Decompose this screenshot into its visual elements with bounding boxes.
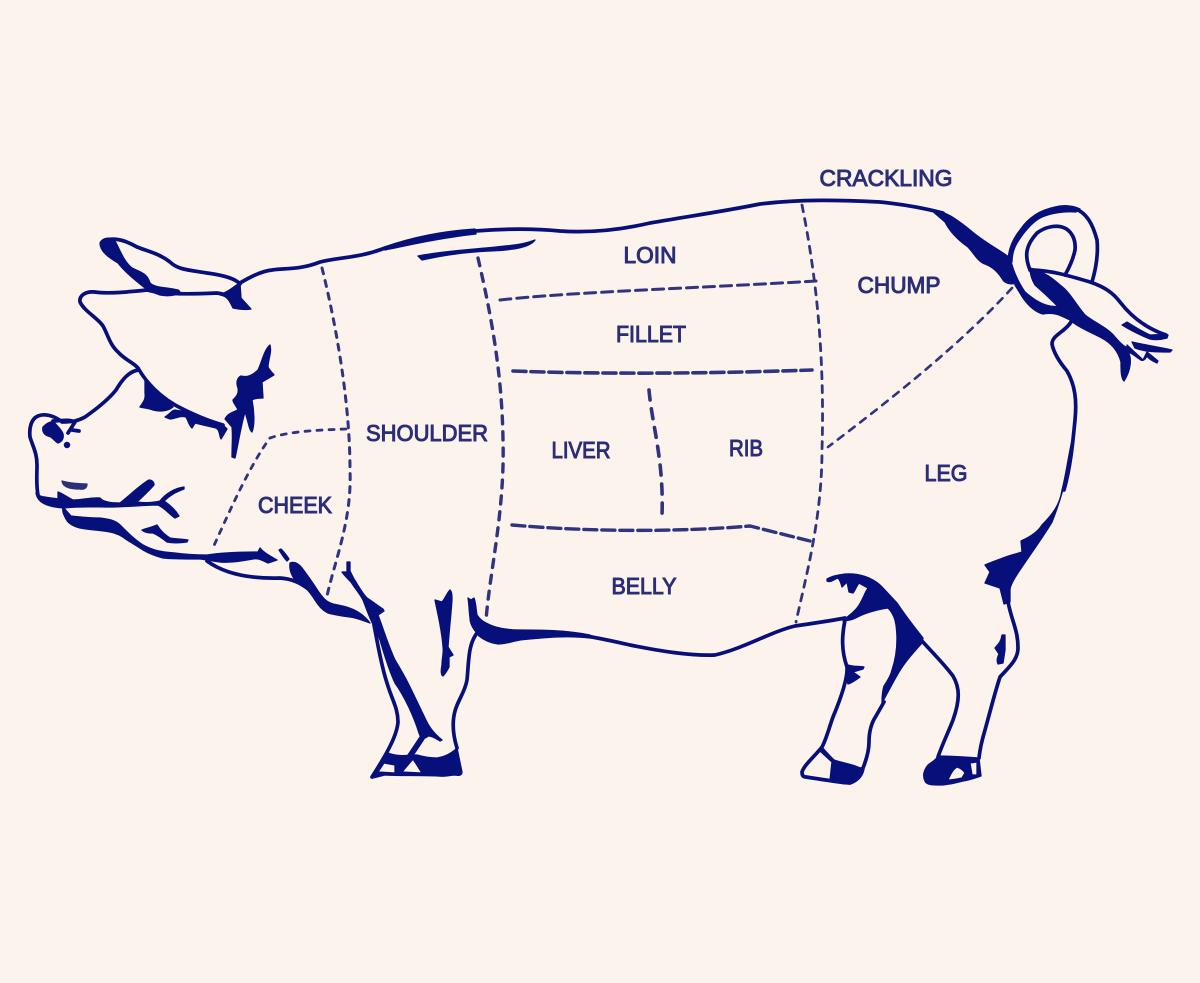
front leg connector: [408, 737, 424, 757]
neck fold: [290, 562, 370, 623]
liver rib divider: [649, 390, 662, 515]
tail outer loop: [1073, 208, 1097, 282]
far hind foot: [820, 747, 864, 784]
near hind foot: [924, 756, 981, 785]
tail outer top: [1008, 206, 1080, 262]
rump shadow on back: [930, 209, 1017, 284]
snout: [30, 370, 138, 495]
chin wrinkle: [142, 525, 188, 543]
cheek line: [212, 429, 346, 550]
neck fold dash: [279, 549, 289, 561]
rear line of hind leg: [979, 602, 1018, 758]
belly line: [540, 618, 845, 655]
cut labels: [258, 165, 968, 599]
label: shoulder: SHOULDER: [366, 420, 488, 446]
pig outline: [30, 200, 1166, 783]
thick ink shadows: [36, 206, 1172, 785]
front foot: [372, 748, 462, 778]
wrinkle under eye: [165, 410, 227, 439]
front leg front line: [372, 625, 398, 777]
dashed cut lines: [212, 205, 1012, 622]
middle leg blade: [435, 590, 453, 676]
label: leg: LEG: [924, 460, 968, 486]
front leg shadow: [342, 562, 442, 741]
upper lip: [36, 480, 184, 518]
tail tassels: [1122, 322, 1172, 352]
lower lip: [63, 507, 277, 563]
nostril: [43, 422, 63, 443]
shoulder front line: [322, 268, 350, 596]
ear base: [220, 283, 251, 309]
label: fillet: FILLET: [616, 321, 686, 347]
shoulder rear line: [478, 258, 503, 620]
back shadow: [385, 229, 476, 250]
label: rib: RIB: [729, 435, 763, 461]
leg line: [828, 288, 1012, 447]
hind shadow: [827, 574, 923, 703]
tail band: [1030, 268, 1158, 381]
eye shadow: [140, 380, 173, 411]
label: crackling: CRACKLING: [820, 165, 952, 191]
label: liver: LIVER: [552, 437, 610, 463]
nostril dot: [64, 442, 70, 448]
belly divider: [512, 525, 810, 541]
neck patch near eye: [225, 345, 274, 458]
tail inner loop: [1027, 226, 1075, 275]
fillet divider: [513, 370, 812, 373]
tail lower loop: [1010, 258, 1070, 320]
label: loin: LOIN: [624, 242, 676, 268]
back line: [240, 200, 943, 283]
tail ribbon top: [1030, 270, 1166, 335]
label: chump: CHUMP: [858, 272, 940, 298]
loin divider: [500, 281, 816, 300]
mouth dash: [62, 481, 87, 489]
haunch line: [1052, 322, 1076, 490]
front leg rear line: [453, 633, 477, 748]
ear shadow: [100, 238, 180, 296]
label: belly: BELLY: [612, 573, 676, 599]
label: cheek: CHEEK: [258, 492, 333, 518]
jaw line: [207, 561, 307, 588]
upper ear: [102, 239, 240, 284]
near hind leg: [922, 641, 958, 757]
belly shadow: [468, 598, 590, 644]
lower ear and forehead: [80, 290, 223, 425]
chump front line: [796, 205, 823, 622]
leg knob: [847, 665, 864, 684]
back crease: [418, 240, 535, 260]
far hind leg: [802, 620, 884, 783]
rump shadow: [985, 440, 1072, 604]
rear leg knob: [995, 635, 1005, 664]
nose wing: [53, 420, 79, 433]
